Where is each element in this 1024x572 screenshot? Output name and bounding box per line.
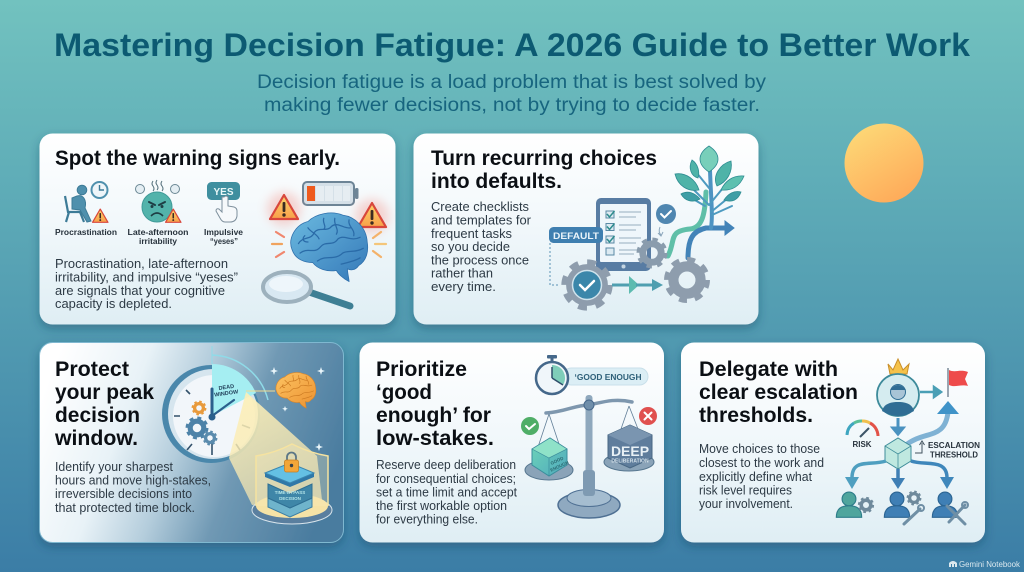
label: Procrastination (55, 228, 117, 237)
heading: ‘good (376, 380, 432, 404)
heading: thresholds. (699, 403, 813, 427)
heading: Delegate with (699, 357, 838, 381)
icon: battery (303, 182, 358, 205)
icon: tablet checklist (596, 198, 651, 271)
text block: explicitly define what (699, 469, 812, 484)
icon: small gear (639, 240, 665, 266)
label: Late-afternoon (128, 228, 189, 237)
heading: Protect (55, 357, 129, 381)
text block (55, 459, 211, 515)
label: escalation threshold (915, 441, 980, 460)
icon: magnifying glass (263, 272, 350, 306)
icon: leader avatar (877, 374, 919, 416)
heading (54, 357, 154, 450)
heading: low-stakes. (376, 426, 494, 450)
text block: Move choices to those (699, 441, 820, 456)
text block: are signals that your cognitive (55, 283, 225, 298)
arrows between gears (612, 276, 663, 294)
icon: team member with gear (836, 492, 873, 517)
icon: team member with wrench and gear (884, 492, 924, 524)
text block (431, 199, 532, 294)
text block: Reserve deep deliberation (376, 457, 516, 472)
arrow down to cube (893, 418, 903, 434)
heading: decision (55, 403, 140, 427)
text block: for consequential choices; (376, 471, 516, 486)
icon: brain (291, 213, 368, 282)
icon: decision cube (885, 438, 911, 469)
icon: crown (888, 359, 909, 374)
icon: good enough cube: ENOUGH (549, 460, 569, 473)
subtitle: making fewer decisions, not by trying to decide faster. (264, 95, 760, 116)
icon: irritated face (136, 180, 181, 222)
icon: stopwatch (536, 355, 568, 394)
icon: clock: WINDOW (214, 389, 239, 399)
icon: warning left (267, 192, 301, 226)
text block: that protected time block. (55, 500, 195, 515)
label (204, 228, 244, 246)
label: escalation threshold: THRESHOLD (930, 450, 978, 460)
text block: frequent tasks (431, 226, 512, 241)
label pill: good enough: ‘GOOD ENOUGH (574, 372, 642, 382)
icon: deep deliberation cube: DEEP (611, 443, 649, 459)
title: Mastering Decision Fatigue: A 2026 Guide to Better Work (54, 27, 970, 63)
icon: deep deliberation cube (608, 425, 652, 468)
text block (699, 441, 824, 511)
connector to brain (246, 390, 275, 392)
icon: check (521, 417, 539, 435)
watermark: Gemini Notebook (959, 560, 1021, 569)
label pill: good enough (563, 368, 648, 385)
heading: your peak (55, 380, 154, 404)
text block: Procrastination, late-afternoon (55, 256, 228, 271)
label (128, 228, 189, 246)
label: irritability (139, 237, 178, 246)
icon: yes button with hand (207, 182, 240, 222)
text block: every time. (431, 279, 496, 294)
text block: irritability, and impulsive “yeses” (55, 270, 238, 284)
label: Impulsive (204, 228, 244, 237)
icon: right gear (667, 260, 707, 300)
icon: protected decision stack (252, 444, 332, 524)
heading (431, 146, 657, 193)
heading: Spot the warning signs early. (55, 146, 340, 170)
text block: your involvement. (699, 496, 793, 511)
icon: large gear with check (565, 263, 609, 307)
heading: Turn recurring choices (431, 146, 657, 170)
icon: risk gauge (847, 421, 878, 437)
text block: capacity is depleted. (55, 296, 172, 311)
text block: closest to the work and (699, 455, 824, 470)
icon: red flag (948, 368, 968, 397)
text block (376, 457, 517, 526)
icon: protected decision stack: DECISION (279, 496, 301, 501)
icon: good enough cube: GOOD (550, 455, 565, 466)
icon: cross (639, 407, 657, 425)
text block: so you decide (431, 239, 510, 254)
icon: alert rays (272, 232, 386, 257)
heading: window. (54, 426, 138, 450)
icon: check circle (656, 204, 676, 236)
text block: set a time limit and accept (376, 484, 517, 500)
panel: turn recurring choices into defaults (414, 134, 758, 324)
heading: Prioritize (376, 357, 467, 381)
text block (55, 256, 238, 311)
light beam (229, 392, 322, 505)
icon: balance scale (525, 395, 654, 518)
arrow to flag (920, 387, 941, 397)
text block: for everything else. (376, 512, 478, 526)
heading (699, 357, 858, 427)
text block: the process once (431, 252, 529, 268)
escalation arrow (906, 401, 959, 445)
label: escalation threshold: ESCALATION (928, 441, 980, 450)
icon: procrastination (65, 182, 108, 222)
label: default: DEFAULT (553, 231, 599, 242)
text block: Identify your sharpest (55, 459, 173, 474)
panel: delegate with escalation thresholds (681, 342, 985, 542)
icon: protected decision stack: TIME-BYPASS (275, 490, 305, 495)
heading: enough’ for (376, 403, 492, 427)
tree with branching paths (668, 146, 744, 258)
delegation arrows (845, 461, 954, 489)
text block: the first workable option (376, 498, 507, 513)
label: “yeses” (210, 237, 238, 246)
icon: clock (162, 346, 268, 463)
icon: warning right (355, 199, 389, 233)
sun circle (844, 124, 924, 202)
icon: orange brain (276, 372, 316, 408)
panel: spot the warning signs (40, 134, 396, 324)
text block: rather than (431, 266, 493, 280)
label: default (549, 227, 603, 285)
text block: hours and move high-stakes, (55, 472, 211, 488)
text block: and templates for (431, 212, 532, 228)
sparkles (270, 367, 325, 451)
subtitle: Decision fatigue is a load problem that is best solved by (257, 72, 767, 93)
label: risk: RISK (852, 440, 872, 449)
text block: irreversible decisions into (55, 486, 192, 501)
icon: yes button with hand: YES (213, 187, 234, 198)
heading: clear escalation (699, 380, 858, 404)
icon: clock: DEAD (218, 384, 235, 392)
text block: risk level requires (699, 482, 792, 498)
panel: prioritize good enough (360, 342, 664, 542)
icon: team member with tools (932, 492, 968, 524)
subtitle (257, 72, 767, 116)
panel: protect your peak decision window (40, 342, 344, 542)
heading (376, 357, 494, 450)
icon: good enough cube (532, 438, 569, 476)
heading: into defaults. (431, 169, 562, 193)
icon: deep deliberation cube: DELIBERATION (611, 458, 649, 464)
text block: Create checklists (431, 199, 529, 214)
